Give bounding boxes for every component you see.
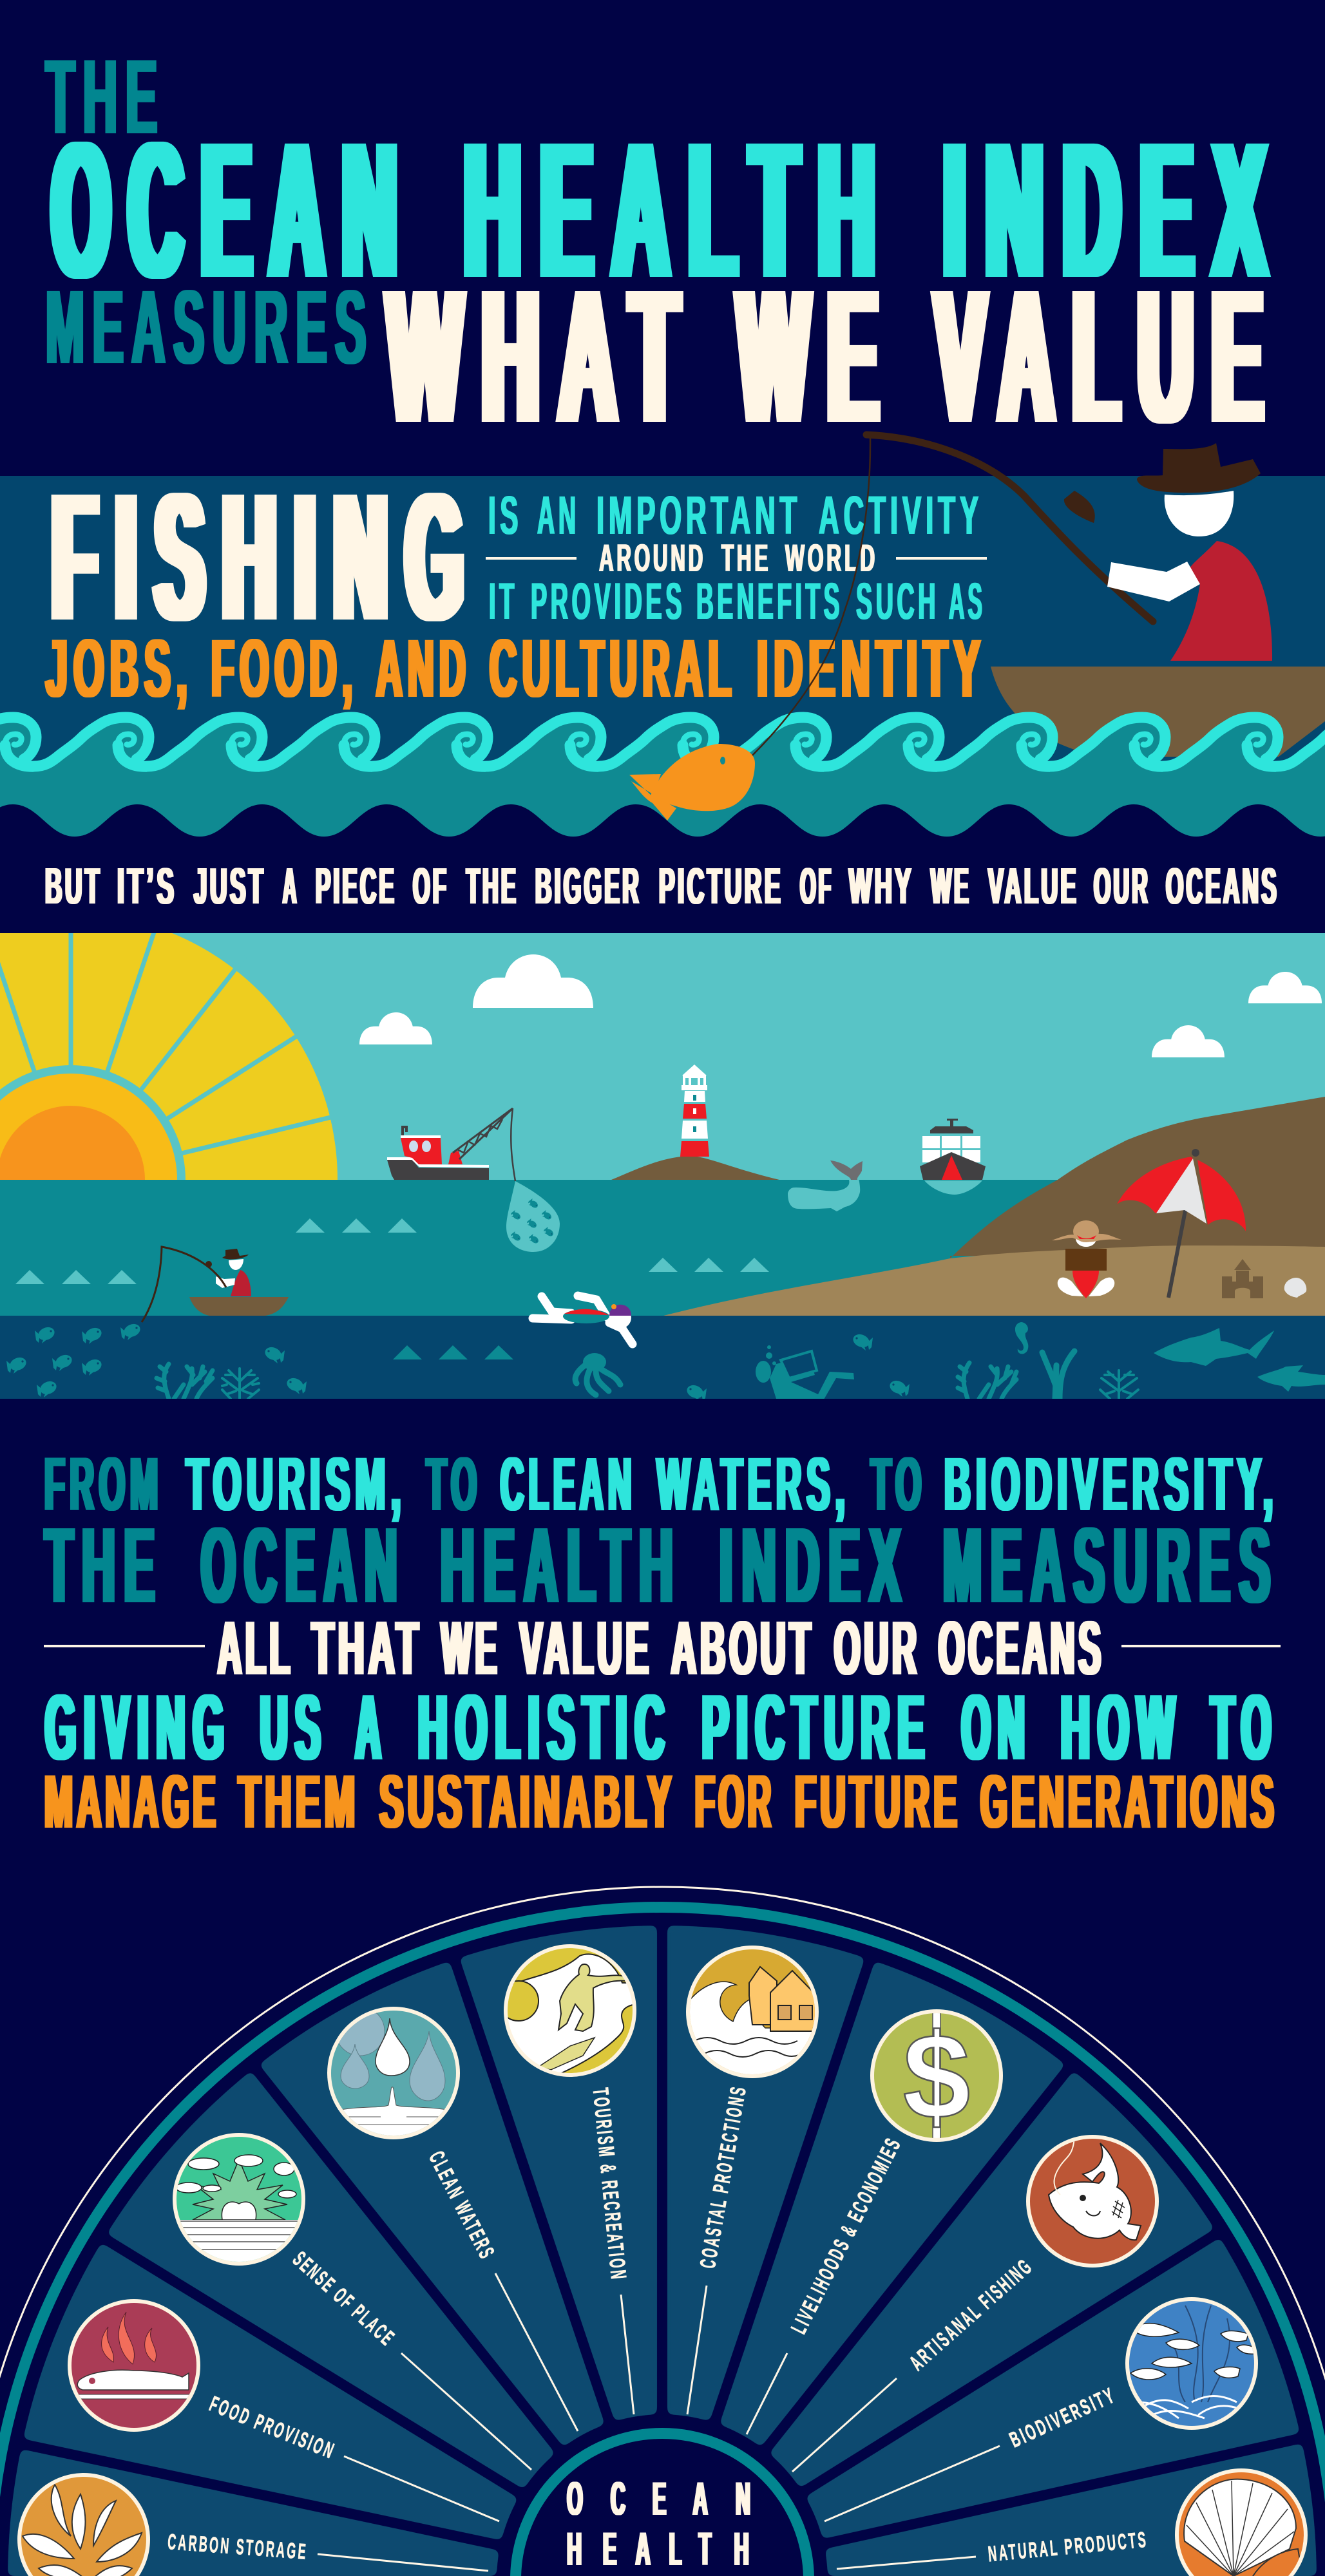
panel: fishing band background <box>0 476 1325 772</box>
text: but it's just a piece: BUT <box>45 857 102 914</box>
illustration: whale <box>788 1160 863 1211</box>
illustration: curling waves <box>0 717 1325 782</box>
title <box>46 37 1286 462</box>
goal labels: SENSE OF PLACE <box>288 2247 400 2351</box>
deep water <box>0 1316 1325 1399</box>
text: IDENTITY <box>757 623 986 715</box>
line: manage them sustainably for future generations: SUSTAINABLY <box>379 1759 676 1844</box>
icon: seashell <box>1284 1278 1306 1298</box>
panel: teal water <box>0 766 1325 839</box>
line: jobs food and cultural identity: FOOD, <box>211 623 358 715</box>
icon: orange fish on the line <box>629 744 755 820</box>
text: but it's just a piece: OF <box>413 857 449 914</box>
line: around the world: AROUND <box>599 536 706 580</box>
text block: fishing: FISHING <box>52 455 482 658</box>
line: giving us a holistic picture on how to <box>45 1675 1279 1779</box>
icon: livelihoods and economies, dollar: $ <box>903 2009 970 2144</box>
text: but it's just a piece: WE <box>931 857 971 914</box>
line: from tourism to clean waters to biodiversity: TO <box>426 1442 482 1527</box>
illustration: reader on beach <box>1052 1220 1121 1298</box>
line: it provides benefits such as: IT <box>489 573 518 630</box>
illustration: hooked and schooling fish <box>6 1321 910 1401</box>
title line: what we value: WHAT <box>388 250 699 462</box>
line: all that we value about our oceans: WE <box>441 1605 500 1691</box>
line: is an important activity: ACTIVITY <box>819 485 983 545</box>
line: giving us a holistic picture on how to: PICTURE <box>702 1675 932 1779</box>
line: giving us a holistic picture on how to: US <box>260 1675 328 1779</box>
line: the ocean health index measures: OCEAN <box>201 1506 406 1625</box>
line: from tourism to clean waters to biodiversity: WATERS, <box>657 1442 850 1527</box>
illustration: container ship <box>920 1119 986 1195</box>
illustration: swimmer <box>533 1296 633 1344</box>
icon: coastal protections, wave and houses <box>686 1946 819 2078</box>
illustration: lighthouse island <box>611 1065 779 1180</box>
line: is an important activity: AN <box>537 485 580 545</box>
text block: from tourism to biodiversity: OCEANS <box>939 1605 1105 1691</box>
icon: livelihoods and economies, dollar <box>870 2009 1003 2144</box>
text: but it's just a piece: A <box>283 857 299 914</box>
line: manage them sustainably for future generations: MANAGE <box>44 1759 220 1844</box>
title line: what we value: WE <box>738 250 897 462</box>
hat <box>1137 443 1261 493</box>
text: but it's just a piece: OF <box>800 857 834 914</box>
goal labels <box>167 2083 1149 2566</box>
leader lines <box>318 2273 1000 2571</box>
goal labels: LIVELIHOODS & ECONOMIES <box>786 2133 906 2338</box>
text: but it's just a piece: PICTURE <box>659 857 783 914</box>
line: from tourism to clean waters to biodiversity: TOURISM, <box>186 1442 406 1527</box>
line: from tourism to clean waters to biodiversity: FROM <box>44 1442 163 1527</box>
line: giving us a holistic picture on how to: GIVING <box>45 1675 232 1779</box>
illustration: hill and beach <box>663 1097 1325 1316</box>
text: but it's just a piece: VALUE <box>988 857 1079 914</box>
line: jobs food and cultural identity: CULTURAL <box>490 623 737 715</box>
line: around the world: WORLD <box>785 536 878 580</box>
icons: clouds <box>359 954 1322 1057</box>
goal labels: BIODIVERSITY <box>1006 2383 1120 2452</box>
wheel panels <box>253 2170 1072 2576</box>
line: jobs food and cultural identity: AND <box>376 623 471 715</box>
line: jobs food and cultural identity <box>46 623 986 715</box>
goal labels: TOURISM & RECREATION <box>588 2087 631 2282</box>
illustration: diver <box>756 1345 854 1404</box>
illustration: beach umbrella <box>1117 1149 1246 1298</box>
icon: sense of place, sunrise <box>173 2133 305 2266</box>
line: the ocean health index measures: THE <box>45 1506 164 1625</box>
line: the ocean health index measures: HEALTH <box>441 1506 682 1625</box>
title: MEASURES <box>46 268 374 386</box>
line: all that we value about our oceans <box>218 1605 1105 1691</box>
text block: from tourism to biodiversity <box>44 1442 1281 1844</box>
illustration: fisherman <box>752 435 1272 755</box>
line: from tourism to clean waters to biodiversity <box>44 1442 1279 1527</box>
goal labels: ARTISANAL FISHING <box>905 2253 1038 2376</box>
panel: coastal scene <box>0 933 1325 1399</box>
line: giving us a holistic picture on how to: HOLISTIC <box>418 1675 672 1779</box>
goal labels: CARBON STORAGE <box>167 2530 309 2564</box>
illustration: seahorse <box>1015 1322 1028 1354</box>
line: manage them sustainably for future generations <box>44 1759 1278 1844</box>
line: manage them sustainably for future generations: THEM <box>238 1759 359 1844</box>
line: all that we value about our oceans: OUR <box>834 1605 920 1691</box>
line: is an important activity: IS <box>488 485 522 545</box>
icon: sand castle <box>1222 1259 1263 1298</box>
icon: artisanal fishing, hooked fish <box>1026 2135 1159 2268</box>
goal labels: CLEAN WATERS <box>424 2147 500 2264</box>
text: but it's just a piece: IT’S <box>117 857 177 914</box>
line: all that we value about our oceans: ABOUT <box>671 1605 815 1691</box>
sky <box>172 933 1325 1180</box>
icon: biodiversity, fish and kelp <box>1125 2297 1258 2430</box>
decorative wave triangles <box>15 1218 769 1284</box>
illustration: large fish <box>1257 1365 1325 1392</box>
text: but it's just a piece: PIECE <box>316 857 397 914</box>
text: but it's just a piece: THE <box>466 857 519 914</box>
icon: clean waters, drops <box>327 2007 460 2139</box>
head <box>1165 491 1234 536</box>
illustration: corals <box>157 1351 1138 1399</box>
icon: fishing trawler <box>387 1108 515 1181</box>
goal labels: NATURAL PRODUCTS <box>987 2528 1149 2566</box>
icon: sun <box>0 933 338 1180</box>
line: from tourism to clean waters to biodiversity: CLEAN <box>500 1442 636 1527</box>
line: the ocean health index measures: INDEX <box>720 1506 910 1625</box>
chart: ocean health index wheel <box>0 1887 1325 2576</box>
icon: natural products, shells <box>1175 2468 1308 2576</box>
wheel hub: HEALTH <box>567 2523 749 2575</box>
icon: fishing net with catch <box>506 1181 560 1252</box>
illustration: small fisherman in boat <box>142 1247 289 1322</box>
text: AS <box>949 573 986 630</box>
fishing rod <box>866 435 1153 621</box>
text: but it's just a piece: BIGGER <box>535 857 642 914</box>
line: all that we value about our oceans: ALL <box>218 1605 294 1691</box>
line: manage them sustainably for future generations: FUTURE <box>795 1759 961 1844</box>
fishing line <box>752 438 870 755</box>
text: but it's just a piece: OUR <box>1094 857 1150 914</box>
line: it provides benefits such as: SUCH <box>856 573 939 630</box>
icon: food provision, fish on plate <box>68 2299 200 2432</box>
illustration: shark <box>1154 1328 1274 1366</box>
line: giving us a holistic picture on how to: ON <box>962 1675 1032 1779</box>
line: from tourism to clean waters to biodiversity: TO <box>871 1442 926 1527</box>
illustration: octopus <box>575 1353 620 1395</box>
decorative scalloped edge <box>0 804 1325 863</box>
illustration: fisherman's boat <box>991 667 1325 757</box>
icon: tourism and recreation, surfer <box>493 1933 641 2077</box>
line: giving us a holistic picture on how to: A <box>356 1675 388 1779</box>
line: it provides benefits such as: BENEFITS <box>696 573 843 630</box>
decorative deep triangles <box>393 1345 513 1359</box>
line: around the world: THE <box>721 536 771 580</box>
wheel hub: OCEAN <box>567 2472 750 2525</box>
icon: carbon storage, kelp <box>17 2473 150 2576</box>
line: all that we value about our oceans: VALUE <box>520 1605 653 1691</box>
shirt <box>1170 541 1272 661</box>
sea <box>0 1180 1058 1316</box>
line: the ocean health index measures <box>45 1506 1279 1625</box>
arm <box>1107 562 1200 601</box>
title: THE <box>46 37 166 156</box>
line: jobs food and cultural identity: JOBS, <box>46 623 193 715</box>
line: it provides benefits such as: PROVIDES <box>531 573 685 630</box>
wheel hub <box>515 2433 809 2576</box>
goal labels: COASTAL PROTECTIONS <box>696 2083 751 2270</box>
line: is an important activity: IMPORTANT <box>596 485 801 545</box>
line: all that we value about our oceans: THAT <box>312 1605 423 1691</box>
goal labels: FOOD PROVISION <box>206 2392 339 2464</box>
line: manage them sustainably for future generations: FOR <box>695 1759 775 1844</box>
line: it provides benefits such as <box>489 573 986 630</box>
text: but it's just a piece: JUST <box>194 857 266 914</box>
title line: ocean health index: OCEAN <box>52 102 415 318</box>
text: but it's just a piece: WHY <box>849 857 914 914</box>
text: but it's just a piece <box>45 857 1279 914</box>
